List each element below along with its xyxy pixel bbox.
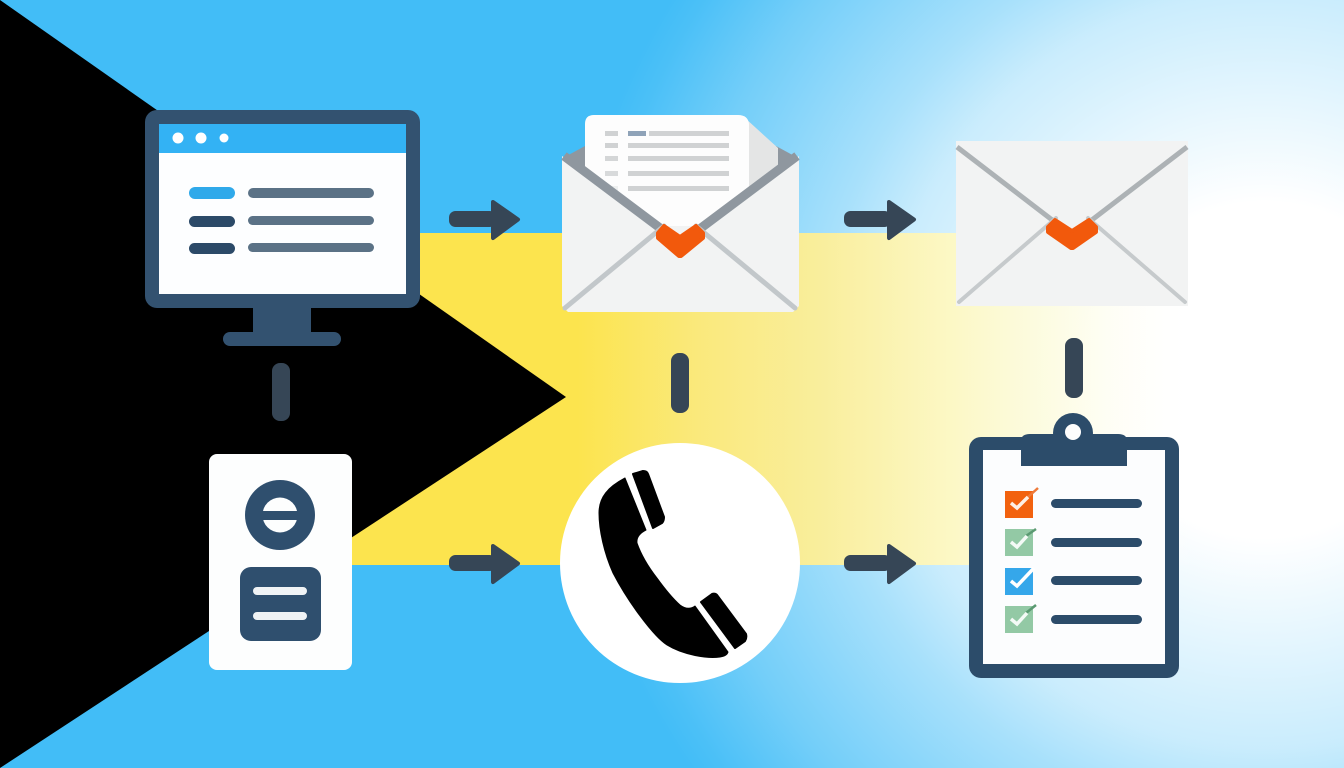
icon: contact card [209, 454, 352, 670]
checklist item: green lower [1005, 605, 1142, 633]
arrow: monitor to open envelope [450, 202, 518, 238]
icon: open envelope with letter [562, 115, 799, 312]
icon: closed envelope [956, 141, 1188, 306]
checklist item: green [1005, 529, 1142, 556]
connector: open envelope to phone [671, 353, 689, 413]
icon: telephone in white circle [560, 443, 800, 683]
connector: closed envelope to clipboard [1065, 338, 1083, 398]
background: black triangle [0, 0, 566, 768]
connector: monitor to contact card [272, 363, 290, 421]
arrow: phone to clipboard [844, 546, 914, 582]
icon: computer monitor [145, 110, 420, 346]
arrow: open envelope to closed envelope [844, 202, 914, 238]
checklist item: blue [1005, 568, 1142, 595]
icon: clipboard checklist [969, 413, 1179, 678]
checklist item: orange [1005, 488, 1142, 518]
arrow: contact card to phone [450, 546, 518, 582]
background: yellow horizontal band [0, 233, 1344, 565]
